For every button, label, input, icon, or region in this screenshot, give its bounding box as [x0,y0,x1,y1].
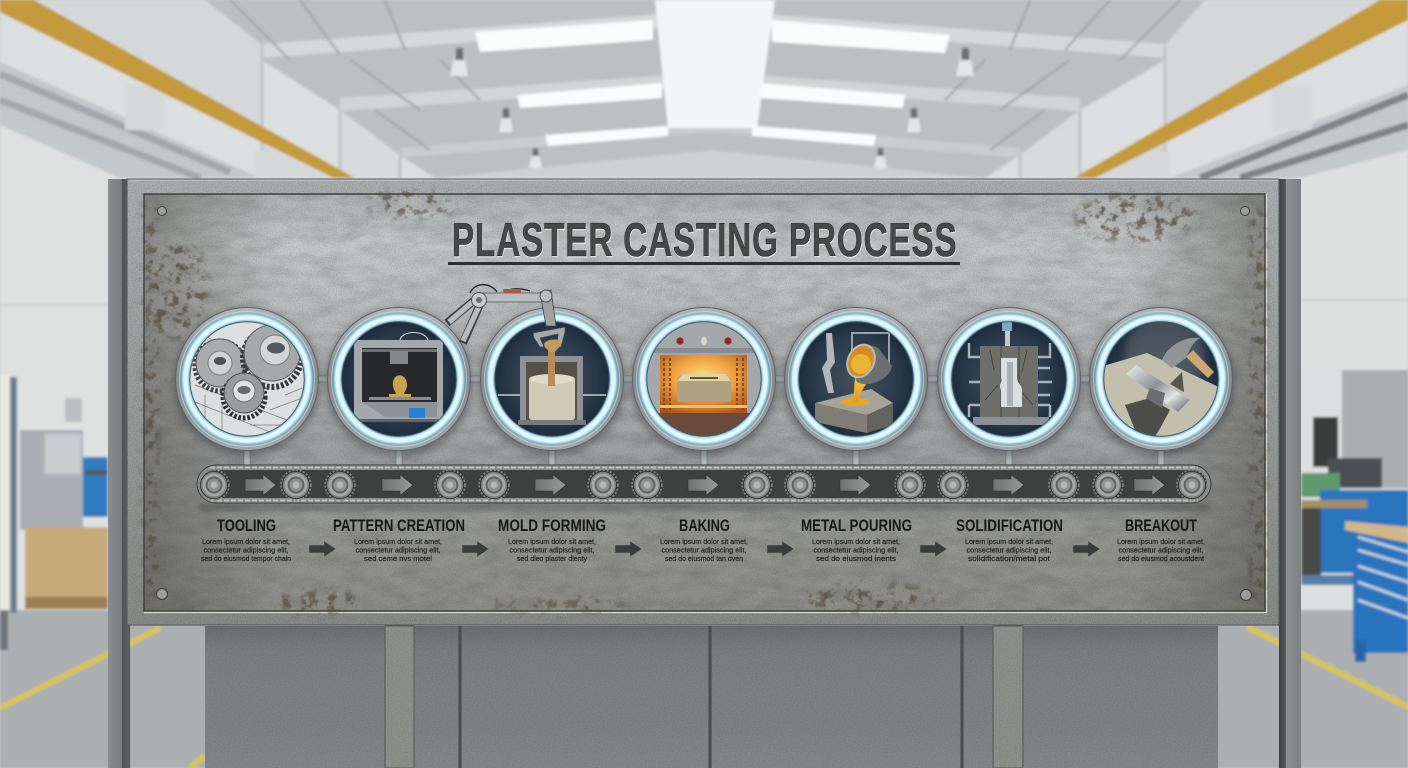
step: breakout: consectetur adipiscing elit, [1118,546,1204,555]
icon: tooling gears on blueprint [173,308,321,456]
step: tooling [201,516,291,563]
sign support posts [108,179,1301,768]
step: mold forming: MOLD FORMING [498,516,606,535]
yellow crane beams [0,0,355,178]
skylights [475,0,950,146]
icon: solidification mold [935,308,1083,456]
step: tooling: TOOLING [217,516,276,535]
icon: baking oven [630,308,778,456]
step: metal pouring [801,516,912,563]
step: tooling: consectetur adipiscing elit, [204,546,288,555]
step: breakout: Lorem ipsum dolor sit amet, [1117,537,1205,546]
step: baking: sed do eiusmod tan oven [665,554,743,563]
step: pattern creation: sed ceme nvs motel [364,554,432,563]
side walls [0,130,108,610]
robot arm [447,285,565,352]
step: tooling: sed do eiusmod tempor chain [201,554,291,563]
step: solidification: SOLIDIFICATION [956,516,1063,535]
step: metal pouring: consectetur adipiscing elit, [814,546,898,555]
step: pattern creation [333,516,465,563]
left storage [0,375,108,650]
conveyor belt [197,465,1211,510]
step: baking: consectetur adipiscing elit, [662,546,746,555]
steel cabinet below the sign [205,626,1218,768]
step: breakout [1117,516,1205,563]
step: mold forming: sed dleo plaster dlenty [517,554,587,563]
step: solidification: consectetur adipiscing elit, [966,546,1052,555]
step: solidification [956,516,1063,563]
step: solidification: solidification/metal pot [968,554,1050,563]
step: solidification: Lorem ipsum dolor sit amet, [965,537,1053,546]
connector links [244,376,1164,465]
icon: 3D printer [325,308,473,456]
bolts [156,206,1252,600]
arrows between steps [309,541,1100,557]
step: metal pouring: sed do eiusmod inents [816,554,896,563]
step: tooling: Lorem ipsum dolor sit amet, [202,537,290,546]
step: mold forming [498,516,606,563]
step: baking: Lorem ipsum dolor sit amet, [660,537,748,546]
step: breakout: sed do eiusmod acoustdent [1118,554,1204,563]
title: PLASTER CASTING PROCESS [452,213,957,266]
belt arrows [245,474,1165,496]
ceiling [0,0,1408,178]
pipe bands [0,62,260,178]
metal sign panel [127,179,1279,625]
icon: breakout with hammer [1087,308,1235,456]
rollers [199,470,1207,500]
step: pattern creation: Lorem ipsum dolor sit amet, [354,537,442,546]
gear left [195,339,245,391]
step: mold forming: Lorem ipsum dolor sit amet, [508,537,596,546]
gear right [243,325,301,387]
gear bottom [223,373,265,418]
icon: mold forming with robot arm [447,285,626,456]
step: baking [660,516,748,563]
floor [0,610,1408,768]
hanging lamps [450,48,974,168]
icon: metal pouring [782,308,930,456]
step: metal pouring: METAL POURING [801,516,912,535]
step: breakout: BREAKOUT [1125,516,1197,535]
step: metal pouring: Lorem ipsum dolor sit amet, [812,537,900,546]
step: pattern creation: PATTERN CREATION [333,516,465,535]
right workshop [1301,370,1408,662]
step: baking: BAKING [679,516,730,535]
step: mold forming: consectetur adipiscing elit, [510,546,594,555]
step: pattern creation: consectetur adipiscing elit, [356,546,440,555]
